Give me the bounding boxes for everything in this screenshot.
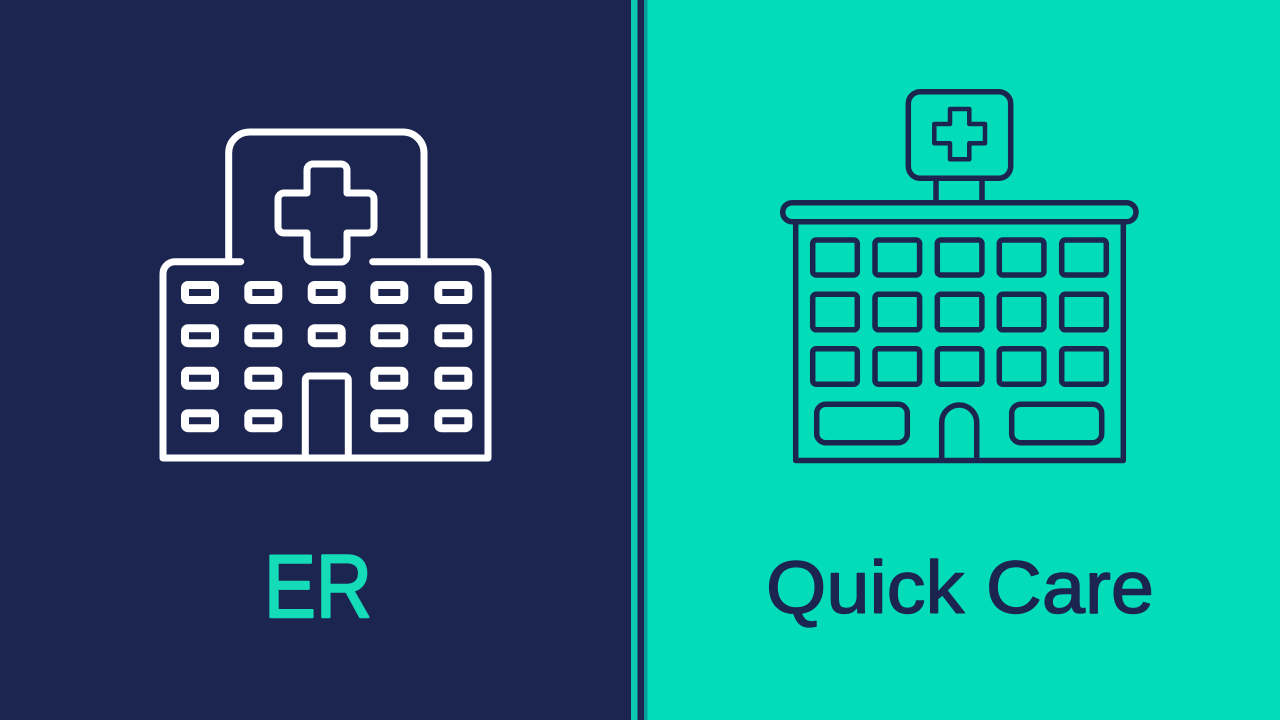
rooftop sign [908, 92, 1011, 178]
door [305, 376, 348, 458]
main block outline [796, 222, 1123, 460]
sign cross [934, 109, 985, 159]
roof slab [783, 203, 1136, 222]
icon: Quick Care clinic building [783, 92, 1136, 460]
medical cross [278, 164, 374, 262]
label: ER: ER [264, 536, 372, 636]
upper tower outline [229, 132, 424, 262]
windows [813, 240, 1106, 443]
icon: ER hospital building [163, 132, 488, 458]
panel: ER background [0, 0, 632, 720]
center divider [631, 0, 648, 720]
arched door [942, 405, 977, 460]
windows [185, 285, 468, 428]
label: Quick Care: Quick Care [766, 546, 1154, 629]
sign posts [936, 178, 982, 203]
main block outline [163, 262, 488, 458]
panel: Quick Care background [646, 0, 1280, 720]
